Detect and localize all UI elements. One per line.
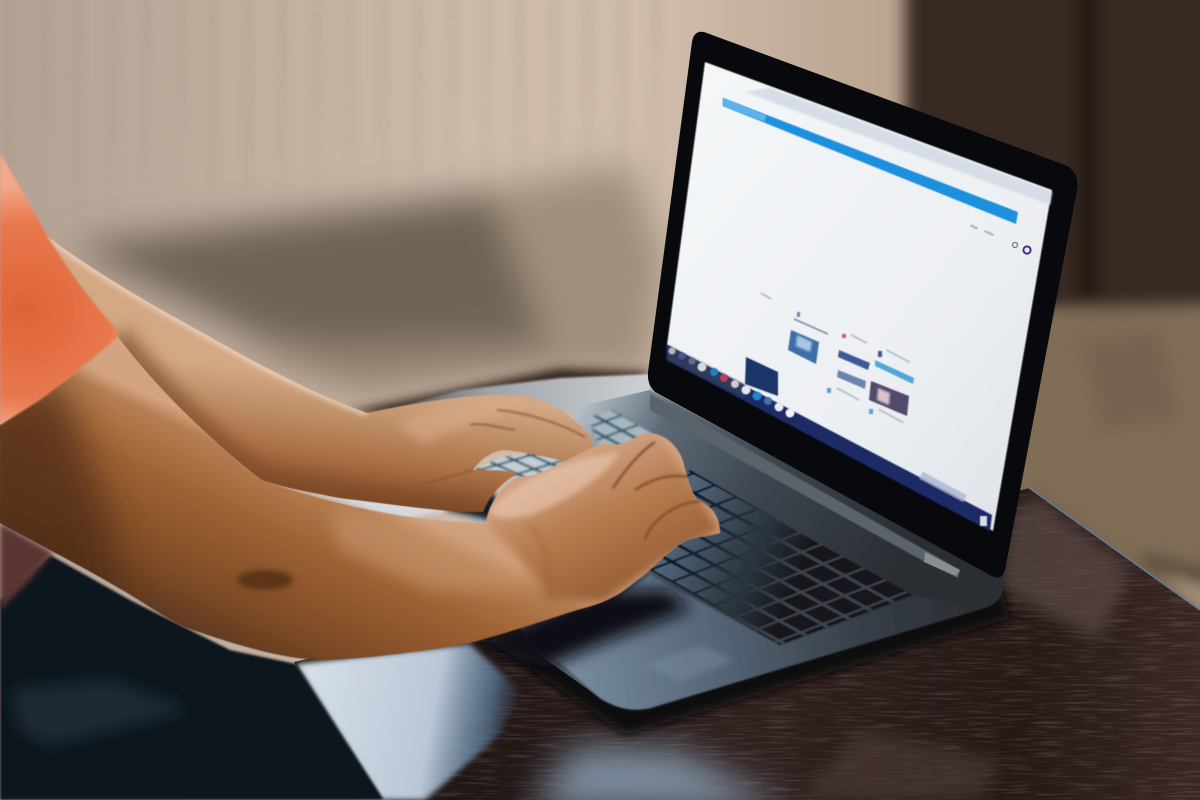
underside shadow bbox=[117, 336, 483, 512]
thumbnail: strip two bbox=[837, 370, 866, 389]
laptop base shadow bbox=[490, 585, 1010, 735]
arm and hand shading bbox=[0, 380, 720, 620]
laptop lid bbox=[648, 32, 1078, 578]
taskbar bbox=[667, 345, 992, 531]
laptop screen bbox=[667, 62, 1052, 531]
near arm and hand bbox=[0, 336, 720, 660]
far arm and hand bbox=[43, 233, 593, 512]
keyboard far section bbox=[588, 410, 660, 448]
small screen labels bbox=[760, 292, 910, 423]
laptop bbox=[445, 32, 1078, 735]
elbow crease bbox=[237, 570, 293, 590]
second reflection bbox=[530, 745, 790, 800]
forearm light band bbox=[330, 510, 540, 590]
hand shadow on deck bbox=[480, 590, 690, 668]
keyboard mid section bbox=[474, 448, 590, 480]
lit top edge bbox=[43, 233, 367, 413]
laptop deck bbox=[470, 390, 1003, 710]
table wood grain bbox=[431, 494, 1200, 800]
trackpad bbox=[645, 645, 735, 682]
profile icon bbox=[1023, 246, 1031, 254]
far finger creases bbox=[420, 410, 585, 485]
table reflection bbox=[296, 644, 520, 800]
dark video thumbnail bbox=[745, 357, 778, 396]
near finger shading bbox=[613, 442, 700, 540]
taskbar icons bbox=[668, 348, 987, 526]
table bbox=[265, 374, 1200, 800]
thumbnail: group photo bbox=[869, 381, 909, 416]
blue header bar bbox=[723, 98, 1018, 224]
hinge bbox=[650, 393, 960, 578]
orange sleeve bbox=[0, 153, 117, 425]
back of near hand bbox=[486, 433, 720, 603]
shaded upper arm bbox=[0, 380, 120, 620]
dark gap under far hand bbox=[445, 480, 500, 520]
toolbar labels bbox=[970, 224, 994, 236]
palm rest bbox=[548, 575, 990, 710]
keyboard near section bbox=[640, 470, 912, 645]
browser tab strip bbox=[745, 88, 1052, 205]
table top highlight behind hands bbox=[380, 374, 650, 420]
far hand highlight bbox=[399, 407, 498, 446]
shirt hem bbox=[0, 523, 53, 610]
pale knuckle highlight bbox=[490, 452, 620, 518]
wrist crease bbox=[531, 526, 540, 536]
blue thumbnail bbox=[788, 330, 819, 364]
dark trousers bbox=[0, 555, 384, 800]
card header bar bbox=[875, 360, 914, 384]
thumbnail: strip one bbox=[838, 350, 870, 370]
table rim bbox=[1028, 487, 1200, 610]
far arm shading bbox=[43, 233, 585, 512]
table lit patches bbox=[1000, 495, 1130, 640]
